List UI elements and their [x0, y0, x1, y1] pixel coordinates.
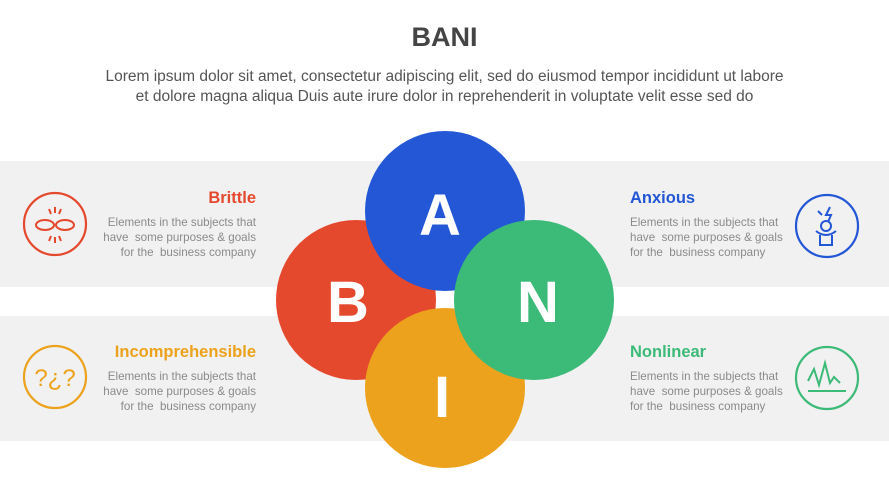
band: top	[0, 161, 889, 287]
text: for the business company	[630, 246, 765, 259]
text: Elements in the subjects that	[108, 216, 256, 229]
icon: broken chain	[22, 192, 88, 256]
text: Elements in the subjects that	[108, 370, 256, 383]
circle B	[276, 220, 436, 380]
heading: Brittle	[208, 189, 256, 207]
circle A: A	[419, 183, 461, 248]
band: bottom	[0, 316, 889, 441]
text: Elements in the subjects that	[630, 370, 778, 383]
panel: anxious	[630, 189, 860, 259]
subtitle: Lorem ipsum dolor sit amet, consectetur adipiscing elit, sed do eiusmod tempor incididunt ut labore	[105, 68, 784, 85]
heading: Nonlinear	[630, 343, 706, 361]
panel: brittle	[22, 189, 256, 259]
panel: nonlinear	[630, 343, 860, 413]
subtitle: et dolore magna aliqua Duis aute irure dolor in reprehenderit in voluptate velit esse sed do	[136, 88, 753, 105]
text: have some purposes & goals	[103, 231, 256, 244]
text: for the business company	[630, 400, 765, 413]
text	[103, 370, 256, 413]
circle B: B	[327, 270, 369, 335]
circle I	[365, 308, 525, 468]
subtitle	[105, 68, 784, 105]
heading: Incomprehensible	[115, 343, 256, 361]
icon: chart line	[794, 346, 860, 410]
circle I: I	[434, 365, 450, 430]
text: have some purposes & goals	[630, 385, 783, 398]
text	[103, 216, 256, 259]
panel: incomprehensible	[22, 343, 256, 413]
circle N	[454, 220, 614, 380]
text	[630, 216, 783, 259]
text: Elements in the subjects that	[630, 216, 778, 229]
circle A	[365, 131, 525, 291]
icon: question marks: ?¿?	[34, 365, 76, 392]
title: BANI	[412, 22, 478, 52]
text: for the business company	[121, 400, 256, 413]
text	[630, 370, 783, 413]
text: for the business company	[121, 246, 256, 259]
icon: question marks	[22, 344, 88, 410]
icon: stressed person	[794, 194, 860, 258]
text: have some purposes & goals	[103, 385, 256, 398]
circle N: N	[517, 270, 559, 335]
heading: Anxious	[630, 189, 695, 207]
text: have some purposes & goals	[630, 231, 783, 244]
